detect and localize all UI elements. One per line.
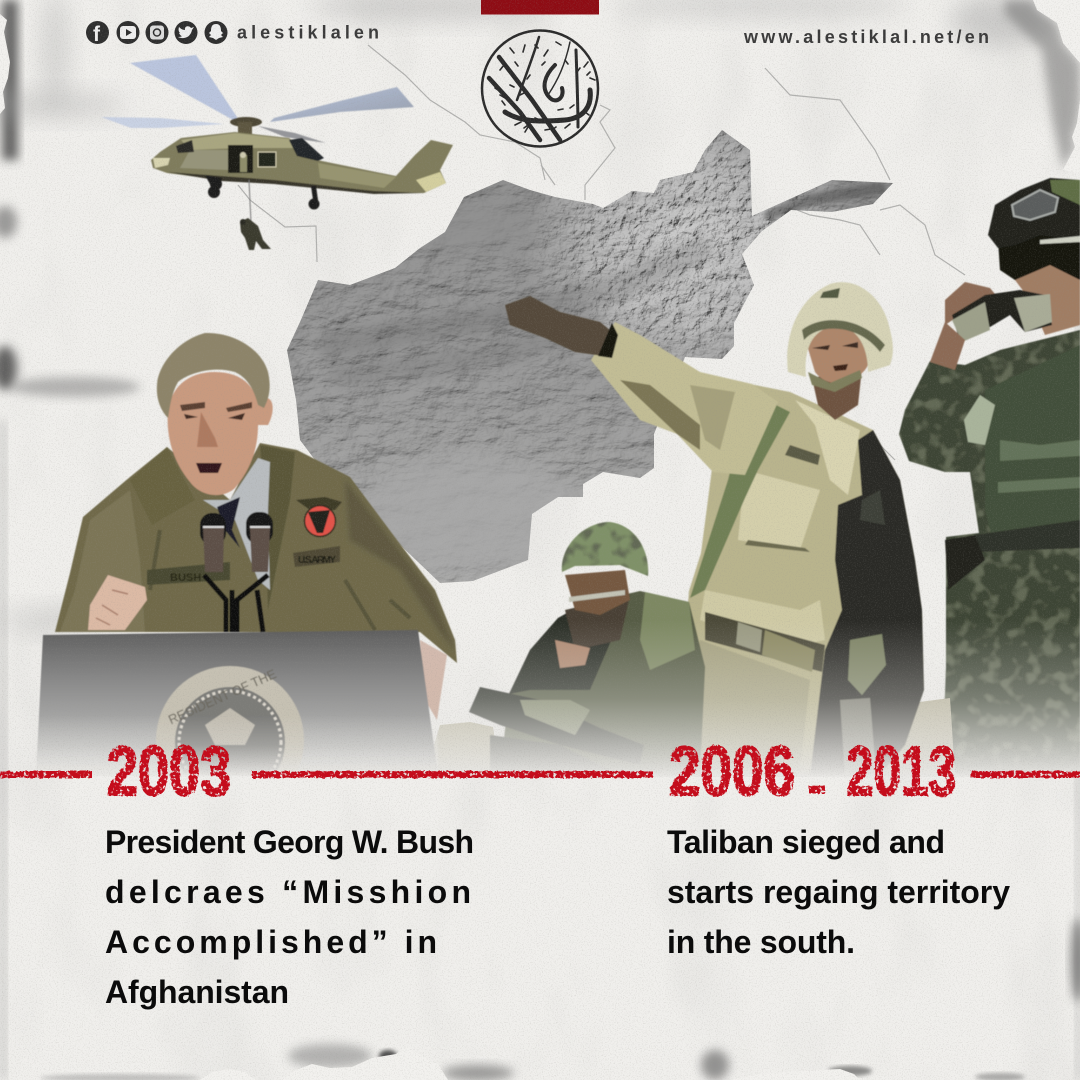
face	[168, 372, 273, 495]
pointing soldier	[505, 282, 924, 775]
George W. Bush at podium	[36, 333, 457, 814]
torso	[655, 384, 924, 775]
website text: www.alestiklal.net/en	[743, 27, 989, 47]
handle text: alestiklalen	[237, 22, 379, 42]
rotor blades	[101, 55, 414, 143]
text block: 2003 event: Afghanistan	[105, 974, 289, 1010]
shoulder strap	[690, 392, 790, 598]
pointing fist	[88, 575, 147, 630]
text block: 2003 event: delcraes “Misshion	[105, 874, 471, 910]
neck and face	[812, 368, 862, 420]
bottom photo fade for soldiers	[425, 620, 1080, 777]
red top tab	[481, 0, 599, 14]
social media icons	[86, 21, 228, 46]
mountain ridges	[330, 188, 880, 375]
text block: 2006-2013 event: Taliban sieged and	[667, 824, 945, 860]
hands and binoculars	[945, 282, 1000, 325]
text block: 2003 event: President Georg W. Bush	[105, 824, 474, 860]
text block: 2003 event: Accomplished” in	[105, 924, 437, 960]
text block: 2006-2013 event: starts regaing territory	[667, 874, 1010, 910]
kneeling soldier	[469, 522, 705, 775]
helicopter	[101, 55, 453, 250]
right soldier with binoculars	[899, 178, 1080, 775]
year 2003: 2003	[107, 732, 231, 810]
fuselage	[151, 132, 453, 193]
text block: 2006-2013 event: in the south.	[667, 924, 855, 960]
hand on podium	[420, 640, 447, 720]
timeline line	[0, 771, 1080, 778]
landing gear	[205, 175, 320, 210]
year range 2006 - 2013: 2006	[669, 732, 795, 810]
jacket	[55, 443, 457, 663]
social media icons: f	[93, 23, 101, 46]
text block: 2003 event	[105, 824, 474, 1010]
shirt and tie	[203, 458, 270, 590]
country borders	[238, 45, 965, 460]
pointing arm	[591, 322, 778, 475]
name tapes	[147, 562, 230, 585]
rifle	[469, 687, 644, 765]
podium	[36, 630, 438, 775]
head and helmet	[998, 215, 1080, 300]
belt and pouches	[705, 612, 825, 672]
unit patch	[304, 506, 336, 536]
body	[899, 330, 1080, 775]
text block: 2006-2013 event	[667, 824, 1010, 960]
desert ground	[425, 698, 955, 775]
presidential seal: RESIDENT OF THE	[166, 666, 279, 727]
helmet	[787, 282, 893, 377]
George W. Bush at podium: U.S.ARMY	[298, 555, 336, 566]
hair	[157, 333, 270, 418]
rope and rappelling soldiers	[240, 180, 271, 250]
year range 2006 - 2013: 2013	[846, 732, 956, 810]
presidential seal	[156, 666, 304, 772]
lower shirt	[700, 590, 825, 650]
map of Afghanistan	[280, 125, 900, 590]
microphones	[200, 512, 273, 632]
George W. Bush at podium: BUSH	[170, 572, 201, 584]
year range 2006 - 2013: -	[808, 760, 826, 813]
glove	[505, 296, 616, 357]
year range 2006 - 2013	[669, 732, 956, 813]
calligraphic logo	[482, 30, 598, 146]
shadow side	[810, 430, 924, 775]
